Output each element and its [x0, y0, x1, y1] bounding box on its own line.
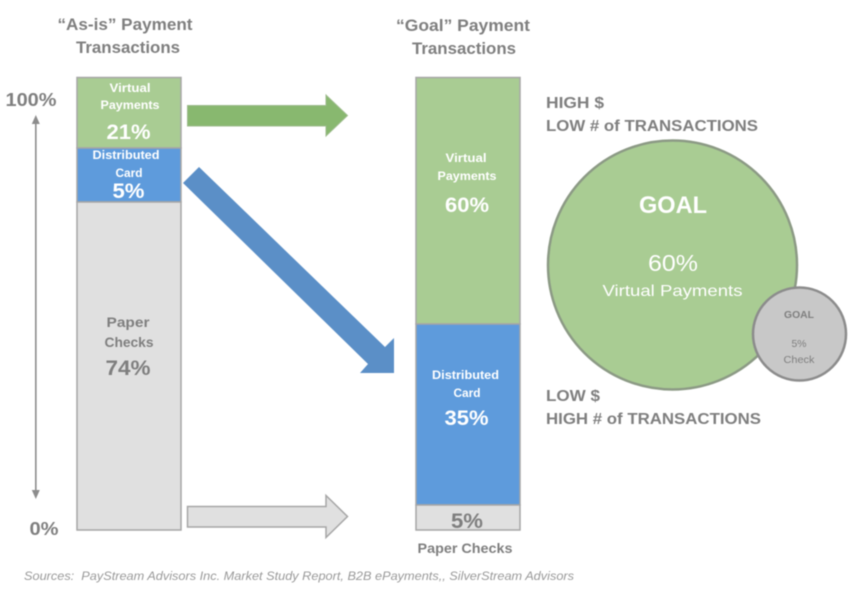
callout: high value: [546, 95, 758, 135]
goal labels: virtual payments: Payments: [438, 171, 496, 183]
heading: goal: Transactions: [412, 40, 516, 58]
callout: high value: HIGH $: [546, 95, 604, 112]
circle: goal 5% check: Check: [784, 354, 815, 366]
axis label: 100%: 100%: [6, 90, 57, 110]
heading: goal: “Goal” Payment: [396, 17, 531, 35]
segment: virtual payments 60%: [416, 78, 520, 324]
axis label: 0%: 0%: [30, 519, 58, 539]
as-is labels: paper checks: [104, 314, 154, 380]
heading: as-is: Transactions: [76, 39, 180, 57]
stacked bar: goal: [416, 78, 520, 530]
as-is labels: virtual payments: [100, 83, 160, 144]
as-is labels: paper checks: Checks: [104, 334, 154, 350]
circle: goal 60%: 60%: [648, 250, 698, 276]
arrow: blue diagonal: [183, 167, 394, 373]
as-is labels: virtual payments: Virtual: [110, 83, 150, 95]
goal labels: virtual payments: 60%: [445, 194, 489, 217]
callout: low value: [546, 388, 761, 428]
segment: paper checks 74%: [77, 202, 181, 530]
goal labels: distributed card: Card: [454, 388, 480, 400]
segment: paper checks 5%: [416, 505, 520, 530]
segment: distributed card 35%: [416, 324, 520, 505]
axis arrow: [32, 115, 40, 499]
as-is labels: distributed card: Distributed: [92, 150, 160, 162]
circle: goal 5% check: 5%: [792, 338, 806, 350]
circle: goal 60%: GOAL: [639, 192, 707, 219]
callout: high value: LOW # of TRANSACTIONS: [546, 118, 758, 135]
goal labels: virtual payments: Virtual: [446, 153, 486, 165]
goal labels: virtual payments: [438, 153, 496, 217]
goal labels: distributed card: [432, 370, 499, 430]
heading: as-is: “As-is” Payment: [58, 16, 193, 34]
segment: distributed card 5%: [77, 148, 181, 202]
arrow: gray: [188, 496, 348, 538]
as-is labels: paper checks: Paper: [106, 314, 150, 330]
as-is labels: distributed card: [92, 150, 160, 203]
heading: as-is: [58, 16, 193, 57]
callout: low value: HIGH # of TRANSACTIONS: [546, 411, 761, 428]
goal labels: distributed card: 35%: [444, 407, 489, 430]
segment: virtual payments 21%: [77, 78, 181, 148]
heading: goal: [396, 17, 531, 58]
as-is labels: paper checks: 74%: [106, 357, 151, 380]
circle: goal 60%: Virtual Payments: [602, 283, 742, 300]
source note: Sources: PayStream Advisors Inc. Market Study Report, B2B ePayments,, SilverStream Advisors: [24, 571, 574, 583]
as-is labels: virtual payments: 21%: [106, 121, 151, 144]
arrow: green: [188, 95, 348, 136]
goal label: paper checks: Paper Checks: [418, 540, 513, 556]
as-is labels: distributed card: Card: [116, 168, 142, 180]
stacked bar: as-is: [77, 78, 181, 530]
goal labels: distributed card: Distributed: [432, 370, 499, 382]
as-is labels: distributed card: 5%: [112, 180, 145, 203]
goal label: 5%: 5%: [451, 510, 483, 533]
circle: goal 60%: [548, 140, 797, 390]
circle: goal 5% check: [753, 288, 846, 380]
callout: low value: LOW $: [546, 388, 600, 405]
as-is labels: virtual payments: Payments: [100, 100, 160, 112]
circle: goal 5% check: GOAL: [784, 309, 815, 321]
